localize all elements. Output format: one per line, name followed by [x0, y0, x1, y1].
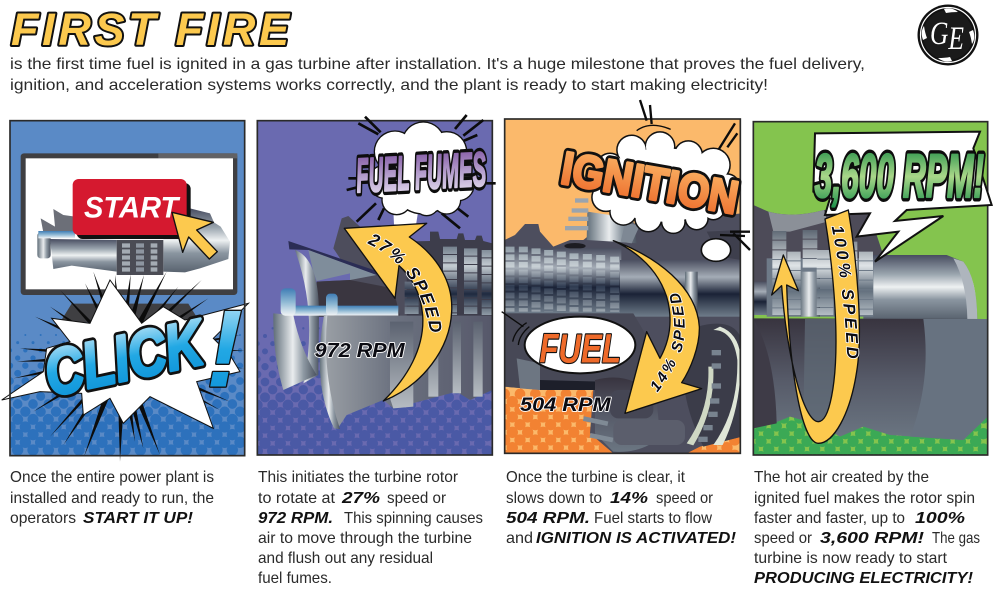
thought bubble	[701, 239, 731, 261]
halftone dots	[10, 335, 247, 450]
caption: step 2: This spinning causes	[344, 510, 483, 527]
click text: !	[206, 288, 243, 411]
panel: fuel fumes	[256, 114, 496, 456]
monitor	[21, 153, 237, 322]
turbine cutaway	[273, 216, 492, 429]
turbine cutaway	[753, 205, 988, 440]
caption: step 2: to rotate at	[258, 490, 336, 507]
icon: GE logo: G	[930, 16, 954, 52]
caption: step 2: This initiates the turbine rotor	[258, 469, 459, 486]
caption: step 2: and flush out any residual	[258, 550, 433, 567]
panel: start click	[2, 121, 250, 462]
caption: step 2: air to move through the turbine	[258, 530, 472, 547]
caption: step 1: START IT UP!	[83, 510, 194, 527]
caption: step 3: Once the turbine is clear, it	[506, 469, 686, 486]
caption: step 3: 14%	[610, 490, 648, 507]
click text: CLICK	[38, 305, 213, 410]
title: FIRST FIRE	[11, 4, 291, 55]
label: 504 rpm: 504 RPM	[520, 395, 612, 416]
caption: step 1: installed and ready to run, the	[10, 490, 214, 507]
caption: step 3: speed or	[656, 490, 714, 507]
arrow: 14% speed: 14% SPEED	[650, 292, 686, 394]
combustion cans	[583, 377, 685, 452]
click burst	[2, 272, 250, 462]
blades	[753, 282, 767, 315]
compressor blades	[412, 247, 487, 315]
icon: cursor arrow	[172, 212, 217, 259]
lower casing	[753, 318, 988, 440]
ignition text: IGNITION	[558, 142, 742, 224]
caption: step 3: 504 RPM.	[506, 510, 590, 527]
caption: step 2	[258, 469, 483, 587]
compressor	[505, 248, 621, 313]
panel: 3600 rpm	[752, 120, 993, 456]
rear disc	[683, 324, 742, 447]
fuel text: FUEL	[539, 326, 621, 372]
intro text: ignition, and acceleration systems works correctly, and the plant is ready to start making electricity!	[10, 77, 768, 94]
click text: CLICK	[38, 305, 213, 410]
text: FUEL FUMES	[355, 143, 487, 203]
arrow: 27% speed: 27% SPEED	[366, 234, 442, 333]
text: FUEL FUMES	[355, 143, 487, 203]
caption: step 4: PRODUCING ELECTRICITY!	[754, 570, 974, 587]
label: 972 rpm: 972 RPM	[315, 340, 405, 362]
caption: step 3: Fuel starts to flow	[594, 510, 712, 527]
rotor cylinder	[863, 255, 977, 319]
caption: step 4: speed or	[754, 530, 813, 547]
arrow: 27% speed	[344, 222, 452, 402]
caption: step 4: 3,600 RPM!	[820, 530, 925, 547]
intro text: is the first time fuel is ignited in a gas turbine after installation. It's a huge milestone that proves the fuel delivery,	[10, 56, 865, 73]
shaft	[281, 288, 398, 316]
arrow: 100% speed	[771, 209, 860, 444]
icon: GE logo: E	[948, 21, 964, 57]
arrow: 14% speed	[612, 240, 702, 414]
caption: step 2: fuel fumes.	[258, 570, 332, 587]
caption: step 1	[10, 469, 214, 527]
caption: step 3	[506, 469, 737, 547]
halftone dots	[257, 328, 493, 451]
small turbine on screen	[37, 208, 230, 275]
lower casing	[506, 313, 644, 388]
caption: step 4: 100%	[915, 510, 965, 527]
intro text	[10, 56, 865, 94]
halftone dots	[505, 394, 742, 455]
fuel bubble	[502, 312, 635, 373]
caption: step 3: slows down to	[506, 490, 602, 507]
halftone dots	[753, 418, 990, 457]
caption: step 2: 972 RPM.	[258, 510, 333, 527]
fuel fumes cloud	[347, 115, 496, 228]
caption: step 4: The hot air created by the	[754, 469, 929, 486]
caption: step 2: speed or	[387, 490, 447, 507]
icon: GE logo	[918, 4, 978, 66]
start button: START	[84, 191, 180, 224]
caption: step 4: The gas	[932, 530, 980, 547]
flange and bolts	[564, 198, 742, 260]
panel: ignition	[501, 100, 751, 454]
turbine body	[324, 316, 492, 429]
caption: step 1: operators	[10, 510, 76, 527]
fuel fumes text	[355, 143, 487, 203]
caption: step 4: turbine is now ready to start	[754, 550, 948, 567]
main shaft	[620, 260, 742, 317]
caption: step 3: IGNITION IS ACTIVATED!	[536, 530, 737, 547]
arrow: 100% speed: 100% SPEED	[830, 226, 860, 359]
caption: step 4: faster and faster, up to	[754, 510, 905, 527]
turbine cutaway	[505, 198, 742, 453]
caption: step 1: Once the entire power plant is	[10, 469, 214, 486]
ignition cloud	[558, 100, 750, 261]
caption: step 3: and	[506, 530, 533, 547]
ignition text: IGNITION	[558, 142, 742, 224]
speech burst	[813, 132, 992, 262]
caption: step 4	[754, 469, 980, 587]
caption: step 4: ignited fuel makes the rotor spin	[754, 490, 975, 507]
start button	[73, 179, 191, 239]
caption: step 2: 27%	[341, 490, 380, 507]
